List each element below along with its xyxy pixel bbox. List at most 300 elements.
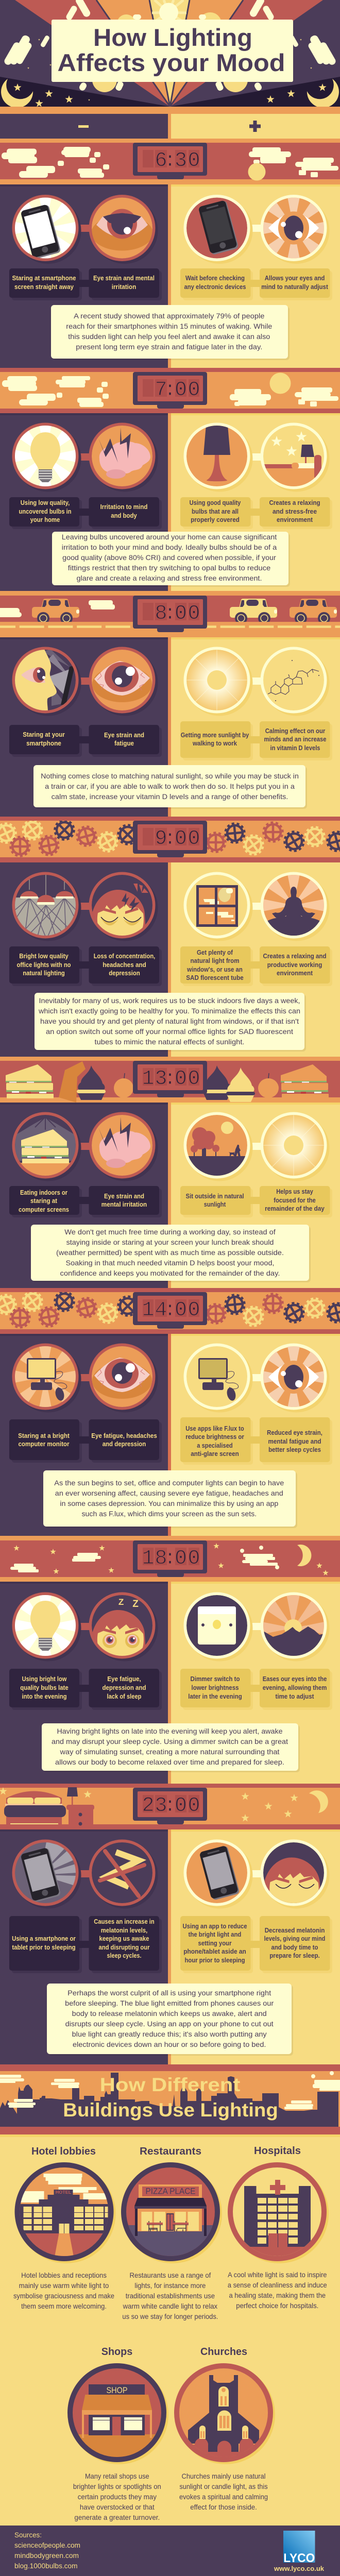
paragraph 23:00: body to release melatonin which keeps us awake, alert and [72, 2009, 267, 2018]
glasses: positive 8:00 [183, 647, 330, 716]
labels negative 13:00: mental irritation [101, 1201, 147, 1208]
paragraph 13:00: staying inside or staring at your screen your lunch break should [66, 1238, 274, 1246]
glasses: negative 6:30 [12, 195, 158, 264]
panel: hotel lobbies: Hotel lobbies [31, 2146, 96, 2157]
labels positive 7:00: Using good quality [190, 499, 241, 506]
text: shops: Many retail shops use [85, 2472, 149, 2480]
panel: restaurants [121, 2146, 222, 2320]
labels positive 9:00: SAD florescent tube [186, 974, 244, 981]
icon: shop: SHOP [106, 2385, 128, 2395]
sources: blog.1000bulbs.com [14, 2562, 77, 2570]
labels negative 6:30: screen straight away [14, 283, 74, 291]
text: churches [179, 2472, 268, 2511]
text: hospitals [228, 2270, 327, 2310]
paragraph 8:00: a train or car, if you are able to walk to work then do so. It helps put you in a [45, 782, 295, 790]
panel backgrounds [0, 862, 340, 1057]
paragraph 7:00 [52, 532, 290, 587]
panel: hospitals [228, 2145, 329, 2310]
labels positive 13:00: focused for the [274, 1197, 316, 1204]
labels positive 6:30: Allows your eyes and [265, 275, 325, 282]
panel backgrounds [0, 637, 340, 817]
labels negative 8:00: Eye strain and [104, 732, 144, 739]
labels negative 18:00: into the evening [22, 1693, 67, 1700]
glasses: positive 13:00 [183, 1112, 330, 1181]
labels negative 13:00: computer screens [19, 1206, 69, 1213]
apple right [258, 1073, 279, 1098]
bed [4, 1791, 66, 1824]
labels positive 18:00: Eases our eyes into the [263, 1675, 327, 1683]
labels negative 7:00: uncovered bulbs in [19, 508, 71, 515]
section 9:00 [0, 817, 340, 1057]
alarm clock 7:00 [133, 372, 207, 409]
text: churches: Churches mainly use natural [182, 2472, 265, 2480]
clouds [0, 2071, 340, 2109]
labels positive 8:00: Calming effect on our [265, 727, 325, 735]
labels negative 7:00: your home [30, 516, 60, 523]
paragraph 23:00: Perhaps the worst culprit of all is using your smartphone right [67, 1989, 271, 1997]
paragraph 6:30: present long term eye strain and fatigue later in the day. [76, 343, 262, 351]
labels negative 13:00: staring at [30, 1197, 58, 1205]
labels positive 23:00: levels, giving our mind [264, 1935, 325, 1942]
paragraph 13:00 [31, 1225, 311, 1282]
lens: bare bulb [12, 422, 81, 492]
labels positive 14:00: a specialised [197, 1442, 233, 1449]
glasses: negative 7:00 [12, 422, 158, 492]
labels positive 23:00: prepare for sleep. [269, 1952, 320, 1959]
footer [0, 2526, 340, 2576]
text: hotel [13, 2271, 114, 2310]
clock band 18:00 with dusk sky [0, 1536, 340, 1582]
labels positive 18:00: time to adjust [275, 1693, 314, 1700]
labels positive 13:00 [180, 1186, 332, 1217]
labels negative 9:00: headaches and [103, 961, 146, 969]
labels positive 6:30: Wait before checking [185, 275, 245, 282]
paragraph 23:00: blue light can greatly reduce this; it's also worth putting any [72, 2030, 267, 2038]
panel: shops: Shops [101, 2346, 132, 2358]
labels positive 7:00: and stress-free [273, 508, 317, 515]
labels negative 23:00: tablet prior to sleeping [12, 1944, 76, 1951]
lens: phone bright [12, 195, 81, 264]
labels positive 13:00: sunlight [204, 1201, 226, 1208]
paragraph 23:00: electronic devices down an hour or so before going to bed. [73, 2040, 266, 2048]
labels positive 23:00: the bright light and [189, 1931, 241, 1938]
panel: hotel lobbies [13, 2146, 115, 2310]
labels negative 9:00 [9, 946, 162, 986]
paragraph 6:30 [51, 305, 290, 360]
paragraph 23:00: disrupts our sleep cycle. Using an app on your phone to cut out [65, 2020, 274, 2028]
labels negative 8:00: smartphone [26, 740, 61, 747]
labels positive 23:00: phone/tablet aside an [183, 1948, 246, 1955]
title: Affects your Mood [58, 49, 285, 76]
paragraph 13:00: Soaking in that much needed vitamin D helps boost your mood, [66, 1259, 274, 1267]
icon: pizza restaurant: PIZZA PLACE [145, 2187, 196, 2196]
alarm clock 23:00: 23:00 [142, 1794, 200, 1818]
labels negative 23:00 [9, 1916, 162, 1973]
labels positive 14:00: reduce brightness or [185, 1433, 244, 1440]
lens: dim phone [183, 1839, 252, 1908]
section 18:00 [0, 1536, 340, 1784]
lens: strained eye [89, 195, 158, 264]
panel: churches [174, 2346, 275, 2511]
labels negative 18:00: depression and [102, 1684, 146, 1691]
labels positive 7:00: environment [277, 516, 313, 523]
glasses: negative 14:00 [3, 1334, 158, 1419]
panel backgrounds [0, 1582, 340, 1784]
labels negative 8:00: fatigue [114, 740, 134, 747]
section 6:30 [0, 143, 340, 368]
paragraph 7:00: fittings restrict that then try switching to opal bulbs to reduce [68, 564, 270, 572]
labels negative 23:00: Using a smartphone or [12, 1935, 76, 1942]
alarm clock 13:00 [133, 1061, 207, 1097]
lens: window [183, 872, 252, 941]
text: restaurants: warm white candle light to relax [123, 2302, 217, 2310]
section 8:00 [0, 591, 340, 817]
paragraph 18:00 [42, 1723, 300, 1772]
glasses: positive 7:00 [183, 422, 330, 492]
labels positive 14:00: Use apps like F.lux to [185, 1425, 244, 1432]
lens: crossed out sleep [89, 1839, 158, 1908]
title [52, 20, 293, 82]
alarm clock 9:00: 9:00 [155, 827, 200, 851]
glasses: positive 14:00 [183, 1335, 336, 1419]
logo: LYCO: www.lyco.co.uk [274, 2565, 325, 2572]
paragraph 18:00: allows our body to become relaxed over time and prepared for sleep. [55, 1758, 284, 1766]
clock band 9:00 with gears [0, 817, 340, 862]
labels positive 23:00: Decreased melatonin [265, 1927, 325, 1934]
text: churches: evokes a spiritual and calming [179, 2493, 268, 2501]
labels positive 6:30: any electronic devices [184, 283, 246, 291]
paragraph 7:00: irritation to both your mind and body. Ideally bulbs should be of a [62, 543, 277, 551]
labels negative 23:00: melatonin levels, [101, 1927, 147, 1934]
clock band 7:00 [0, 368, 340, 413]
text: hotel: mainly use warm white light to [19, 2281, 109, 2290]
paragraph 6:30: reach for their smartphones within 15 minutes of waking. While [66, 322, 273, 330]
paragraph 7:00: glare and create a relaxing and stress free environment. [76, 574, 262, 582]
panel: hospitals: Hospitals [254, 2145, 301, 2157]
labels negative 23:00: keeping us awake [99, 1935, 149, 1942]
section 13:00 [0, 1057, 340, 1288]
labels negative 6:30: irritation [112, 283, 136, 291]
paragraph 9:00: have you should try and get plenty of natural light from windows, or if that isn't [40, 1017, 299, 1025]
lens: dimmer switch [183, 1592, 252, 1661]
labels negative 13:00: Eating indoors or [20, 1189, 67, 1196]
labels positive 13:00: Helps us stay [276, 1188, 313, 1195]
labels positive 8:00: minds and an increase [264, 736, 327, 743]
alarm clock 14:00: 14:00 [142, 1299, 200, 1322]
sources: Sources: [14, 2531, 42, 2539]
lens: sunlight [261, 1112, 330, 1181]
paragraph 14:00: in some cases depression. You can minimalize this by using an app [60, 1499, 279, 1507]
labels negative 14:00 [9, 1419, 162, 1463]
cupcake purple right [202, 1065, 231, 1100]
text: hospitals: a healing state, making them the [229, 2291, 326, 2299]
heading: Buildings Use Lighting [63, 2099, 278, 2121]
icon: shop [67, 2363, 168, 2464]
lens: brain [89, 1112, 158, 1181]
paragraph 9:00: which isn't exactly going to be healthy for you. To minimalize the effects this can [38, 1007, 300, 1015]
labels negative 7:00: Using low quality, [21, 499, 70, 506]
labels positive 18:00 [180, 1669, 332, 1710]
paragraph 13:00: We don't get much free time during a working day, so instead of [64, 1228, 276, 1236]
labels positive 8:00 [180, 721, 332, 760]
alarm clock 9:00 [133, 821, 207, 857]
lens: dimmed computer [183, 1344, 252, 1413]
lens: bloodshot eye [89, 647, 158, 716]
lens: meditation [261, 872, 330, 941]
labels positive 9:00: Get plenty of [197, 949, 233, 956]
labels negative 7:00: Irritation to mind [100, 503, 147, 511]
lens: sunset mountains [251, 1586, 335, 1670]
lens: glowing phone [12, 1839, 81, 1908]
labels negative 9:00: Bright low quality [19, 953, 69, 960]
labels positive 8:00: Getting more sunlight by [181, 732, 249, 739]
labels negative 18:00: Eye fatigue, [107, 1675, 141, 1683]
panel backgrounds [0, 1103, 340, 1288]
paragraph 8:00 [33, 765, 307, 809]
icon: hotel [14, 2162, 115, 2263]
labels positive 6:30 [180, 268, 332, 300]
paragraph 14:00: As the sun begins to set, office and computer lights can begin to have [54, 1479, 284, 1487]
paragraph 14:00 [43, 1470, 297, 1528]
lens: relaxing bedroom [261, 422, 330, 492]
labels positive 14:00 [180, 1417, 332, 1465]
labels positive 23:00: and body time to [271, 1944, 318, 1951]
lens: headache face [89, 872, 158, 941]
text: hotel: symbolise graciousness and make [13, 2292, 114, 2300]
glasses: positive 18:00 [183, 1586, 335, 1670]
labels positive 9:00: environment [277, 970, 313, 977]
panel backgrounds [0, 413, 340, 591]
labels negative 14:00: Staring at a bright [18, 1432, 70, 1439]
text: hotel: Hotel lobbies and receptions [21, 2271, 107, 2279]
labels positive 8:00: walking to work [192, 740, 237, 747]
heading [63, 2074, 278, 2121]
alarm clock 8:00: 8:00 [155, 602, 200, 625]
labels positive 9:00: window's, or use an [186, 966, 243, 973]
sun [159, 3, 178, 20]
panel backgrounds [0, 1334, 340, 1536]
text: shops [73, 2472, 161, 2521]
labels negative 14:00: Eye fatigue, headaches [91, 1432, 157, 1439]
labels positive 7:00: properly covered [191, 516, 240, 523]
labels positive 23:00: hour prior to sleeping [184, 1957, 245, 1964]
text: hospitals: a sense of cleanliness and induce [228, 2281, 327, 2289]
paragraph 18:00: and may disrupt your sleep cycle. Using a dimmer switch can be a great [52, 1737, 288, 1745]
sources: scienceofpeople.com [14, 2541, 80, 2549]
icon: pizza restaurant [121, 2162, 222, 2263]
labels positive 8:00: in vitamin D levels [270, 744, 320, 752]
paragraph 8:00: calm state, increase your vitamin D levels and a range of other benefits. [52, 792, 288, 801]
lens: park [183, 1112, 252, 1181]
labels negative 13:00 [9, 1186, 162, 1217]
alarm clock 23:00 [133, 1788, 207, 1824]
lens: sleeping face [261, 1839, 330, 1912]
paragraph 9:00: tubes to mimic the natural effects of sunlight. [95, 1038, 244, 1046]
labels positive 7:00 [180, 497, 332, 529]
labels negative 9:00: natural lighting [23, 970, 65, 977]
paragraph 13:00: confidence and keeps you motivated for the remainder of the day. [60, 1269, 280, 1277]
labels positive 23:00: setting your [198, 1940, 232, 1947]
text: hospitals: A cool white light is said to inspire [228, 2270, 327, 2279]
glasses: negative 18:00 [3, 1583, 158, 1668]
labels negative 18:00: Using bright low [22, 1675, 67, 1683]
panel: restaurants: Restaurants [140, 2146, 201, 2157]
labels positive 14:00: anti-glare screen [191, 1450, 239, 1458]
icon: hotel: HOTEL [56, 2190, 72, 2195]
paragraph 14:00: such as F.lux, which dims your screen as the sun sets. [81, 1510, 257, 1518]
labels positive 13:00: Sit outside in natural [185, 1193, 244, 1200]
lens: sunlight [183, 647, 252, 716]
clock band 8:00 with traffic [0, 591, 340, 637]
labels positive 23:00: Using an app to reduce [182, 1923, 247, 1930]
labels negative 23:00: sleep cycles. [107, 1952, 141, 1959]
lens: tired face [89, 1592, 158, 1662]
alarm clock 13:00: 13:00 [142, 1067, 200, 1091]
alarm clock 6:30: 6:30 [155, 149, 200, 173]
text: churches: effect for those inside. [190, 2503, 257, 2511]
paragraph 9:00 [35, 993, 306, 1052]
panel backgrounds [0, 1829, 340, 2064]
paragraph 23:00 [47, 1984, 293, 2056]
text: shops: certain products they may [78, 2493, 157, 2501]
cupcake yellow right [226, 1067, 255, 1102]
labels positive 18:00: later in the evening [188, 1693, 242, 1700]
glasses: negative 23:00 [12, 1839, 158, 1908]
buildings header band [0, 2064, 340, 2137]
text: restaurants: lights, for instance more [134, 2281, 206, 2290]
lens: bright bulb [3, 1583, 88, 1668]
lens: office lights [12, 872, 81, 941]
labels positive 14:00: Reduced eye strain, [267, 1429, 322, 1436]
lens: open eye [261, 195, 330, 264]
icon: hospital [228, 2162, 329, 2263]
lens: tired face: Z [118, 1597, 124, 1607]
section 14:00 [0, 1288, 340, 1536]
moons and stars [1, 39, 339, 108]
labels negative 9:00: depression [109, 970, 140, 977]
labels negative 8:00 [9, 725, 162, 757]
cupcake left [77, 1065, 106, 1100]
glasses: negative 8:00 [12, 647, 158, 716]
paper bag [59, 1061, 86, 1103]
labels negative 7:00 [9, 497, 162, 529]
title: How Lighting [93, 24, 252, 51]
glasses: negative 13:00 [12, 1112, 158, 1181]
labels positive 14:00: mental fatigue and [268, 1438, 321, 1445]
labels negative 7:00: and body [111, 512, 137, 519]
labels positive 7:00: Creates a relaxing [269, 499, 320, 506]
sandwich left [6, 1064, 54, 1098]
text: restaurants: traditional establishments use [126, 2292, 215, 2300]
minus and plus legend band [0, 107, 340, 143]
paragraph 14:00: an ever worsening affect, causing severe eye fatigue, headaches and [55, 1489, 283, 1497]
paragraph 6:30: A recent study showed that approximately 79% of people [74, 312, 265, 320]
logo: LYCO [274, 2531, 325, 2572]
sources: mindbodygreen.com [14, 2551, 79, 2560]
labels negative 23:00: and disrupting our [99, 1944, 150, 1951]
labels positive 18:00: Dimmer switch to [191, 1675, 240, 1683]
labels negative 18:00: lack of sleep [107, 1693, 142, 1700]
alarm clock 18:00: 18:00 [142, 1547, 200, 1570]
labels negative 6:30 [9, 268, 162, 300]
panel backgrounds [0, 184, 340, 368]
labels positive 23:00 [180, 1916, 332, 1973]
panel: shops [67, 2346, 168, 2521]
labels positive 9:00: productive working [267, 961, 322, 969]
labels negative 6:30: Eye strain and mental [93, 275, 155, 282]
labels positive 14:00: better sleep cycles [268, 1446, 321, 1453]
paragraph 6:30: this sudden light can help you feel alert and awake it can also [68, 332, 270, 341]
labels negative 23:00: Causes an increase in [94, 1918, 155, 1925]
nightstand and lamp [66, 1787, 94, 1826]
lens: open eye [251, 1335, 336, 1419]
paragraph 13:00: (weather permitted) be spent with as much time as possible outside. [56, 1248, 284, 1257]
lens: covered lamp [183, 422, 252, 492]
labels negative 9:00: office lights with no [16, 961, 71, 969]
text: shops: brighter lights or spotlights on [73, 2482, 161, 2490]
text: shops: have overstocked or that [80, 2503, 155, 2511]
panel: churches: Churches [200, 2346, 247, 2358]
section 7:00 [0, 368, 340, 591]
paragraph 8:00: Nothing comes close to matching natural sunlight, so while you may be stuck in [41, 772, 299, 780]
section 23:00 [0, 1784, 340, 2064]
clock band 6:30 [0, 143, 340, 184]
night sky rays [0, 0, 340, 107]
clock band 13:00 with food [0, 1057, 340, 1103]
skyline [0, 2073, 338, 2127]
labels negative 18:00 [9, 1669, 162, 1710]
text: shops: generate a greater turnover. [74, 2513, 160, 2521]
paragraph 7:00: good quality (above 80% CRI) and covered when possible, if your [62, 553, 276, 562]
lens: irritated brain [89, 422, 158, 492]
paragraph 18:00: way of simulating sunset, creating a more natural surrounding that [59, 1748, 280, 1756]
yellow blobs and clouds [3, 0, 337, 92]
lens: vitamin D molecule [261, 647, 330, 716]
labels negative 8:00: Staring at your [23, 731, 65, 738]
alarm clock 18:00 [133, 1540, 207, 1577]
lens: face and phone in profile [12, 647, 81, 716]
labels positive 18:00: evening, allowing them [263, 1684, 327, 1691]
labels negative 13:00: Eye strain and [104, 1193, 144, 1200]
clock band 14:00 with gears [0, 1288, 340, 1334]
glasses: positive 23:00 [183, 1839, 330, 1912]
labels positive 7:00: bulbs that are all [192, 508, 239, 515]
icon: church [174, 2363, 275, 2464]
lens: bright computer [3, 1334, 88, 1419]
sources [14, 2531, 80, 2570]
text: hotel: them seem more welcoming. [21, 2302, 107, 2310]
labels positive 6:30: mind to naturally adjust [261, 283, 329, 291]
paragraph 7:00: Leaving bulbs uncovered around your home can cause significant [62, 533, 277, 541]
labels negative 6:30: Staring at smartphone [12, 275, 76, 282]
labels positive 13:00: remainder of the day [265, 1205, 325, 1212]
lens: sandwich [12, 1112, 81, 1181]
labels negative 14:00: computer monitor [19, 1440, 70, 1448]
paragraph 9:00: an option switch out some off your normal office lights for SAD fluorescent [46, 1027, 293, 1036]
text: hospitals: perfect choice for hospitals. [236, 2301, 318, 2310]
apple left [114, 1073, 133, 1098]
text: restaurants [122, 2271, 218, 2320]
labels positive 18:00: lower brightness [192, 1684, 239, 1691]
alarm clock 8:00 [133, 596, 207, 632]
paragraph 9:00: Inevitably for many of us, work requires us to be stuck indoors five days a week, [39, 996, 300, 1005]
text: restaurants: Restaurants use a range of [130, 2271, 211, 2279]
labels positive 9:00: natural light from [191, 957, 239, 964]
alarm clock 14:00 [133, 1292, 207, 1329]
glasses: positive 9:00 [183, 872, 330, 941]
sandwich right [281, 1064, 329, 1098]
labels negative 9:00: Loss of concentration, [94, 953, 155, 960]
